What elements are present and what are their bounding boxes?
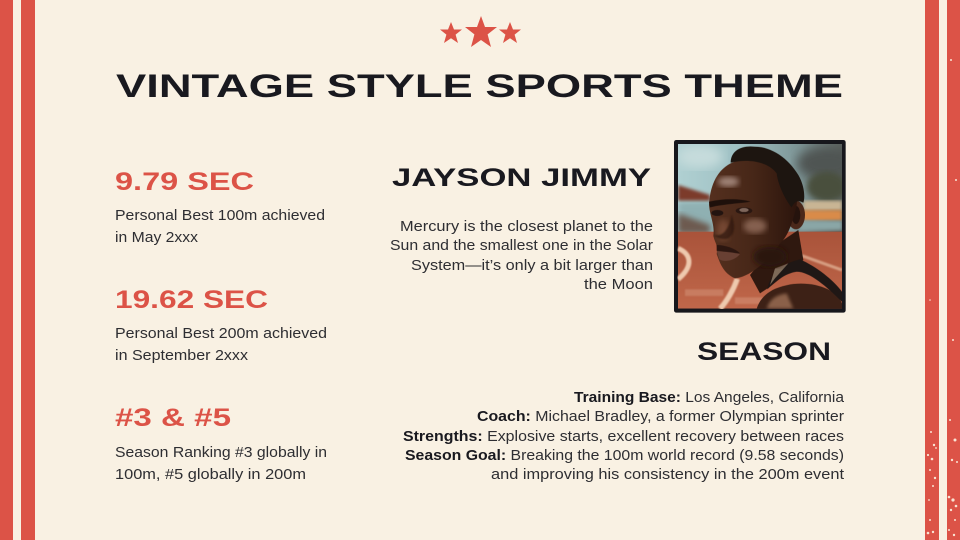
stat description: ranking: Season Ranking #3 globally in <box>115 444 327 461</box>
mouth <box>717 245 740 253</box>
right stripes <box>925 0 960 540</box>
stat description: ranking: 100m, #5 globally in 200m <box>115 466 306 483</box>
season details: Coach: Michael Bradley, a former Olympian sprinter <box>477 408 844 425</box>
athlete description: System—it’s only a bit larger than <box>411 257 653 274</box>
stat value: 19.62 sec: 19.62 SEC <box>115 286 268 314</box>
athlete description: Mercury is the closest planet to the <box>400 218 653 235</box>
season details <box>403 389 845 483</box>
head <box>709 158 797 278</box>
stands <box>678 201 714 232</box>
icon: three stars <box>440 16 521 47</box>
stat value: 9.79 sec: 9.79 SEC <box>115 168 254 196</box>
title: VINTAGE STYLE SPORTS THEME <box>116 68 843 104</box>
athlete description: the Moon <box>584 276 653 293</box>
season details: Season Goal: Breaking the 100m world record (9.58 seconds) <box>405 447 844 464</box>
athlete description: Sun and the smallest one in the Solar <box>390 237 653 254</box>
forehead highlight <box>718 177 739 187</box>
athlete name: JAYSON JIMMY <box>392 164 651 192</box>
eyes and brow <box>709 199 751 207</box>
tank strap <box>767 259 842 302</box>
stat description: 200m: in September 2xxx <box>115 347 249 364</box>
track <box>678 232 842 309</box>
season details: Strengths: Explosive starts, excellent recovery between races <box>403 428 844 445</box>
body <box>757 284 842 309</box>
season details: Training Base: Los Angeles, California <box>574 389 845 406</box>
stat description: 100m: in May 2xxx <box>115 229 199 246</box>
season details: and improving his consistency in the 200m event <box>491 466 845 483</box>
stat value: #3 & #5: #3 & #5 <box>115 404 231 432</box>
stat description: ranking <box>115 444 327 483</box>
stat: season ranking <box>115 404 327 483</box>
nose shadow <box>714 215 734 239</box>
season heading: SEASON <box>697 338 831 366</box>
athlete portrait <box>674 140 857 313</box>
stat: 200m personal best <box>115 286 327 364</box>
left stripes <box>0 0 35 540</box>
ear <box>790 201 805 230</box>
hair <box>731 146 804 207</box>
stat: 100m personal best <box>115 168 325 246</box>
stat description: 100m <box>115 207 325 246</box>
neck <box>750 230 803 293</box>
stat description: 200m <box>115 325 327 364</box>
athlete description <box>390 218 653 293</box>
stat description: 200m: Personal Best 200m achieved <box>115 325 327 342</box>
stat description: 100m: Personal Best 100m achieved <box>115 207 325 224</box>
